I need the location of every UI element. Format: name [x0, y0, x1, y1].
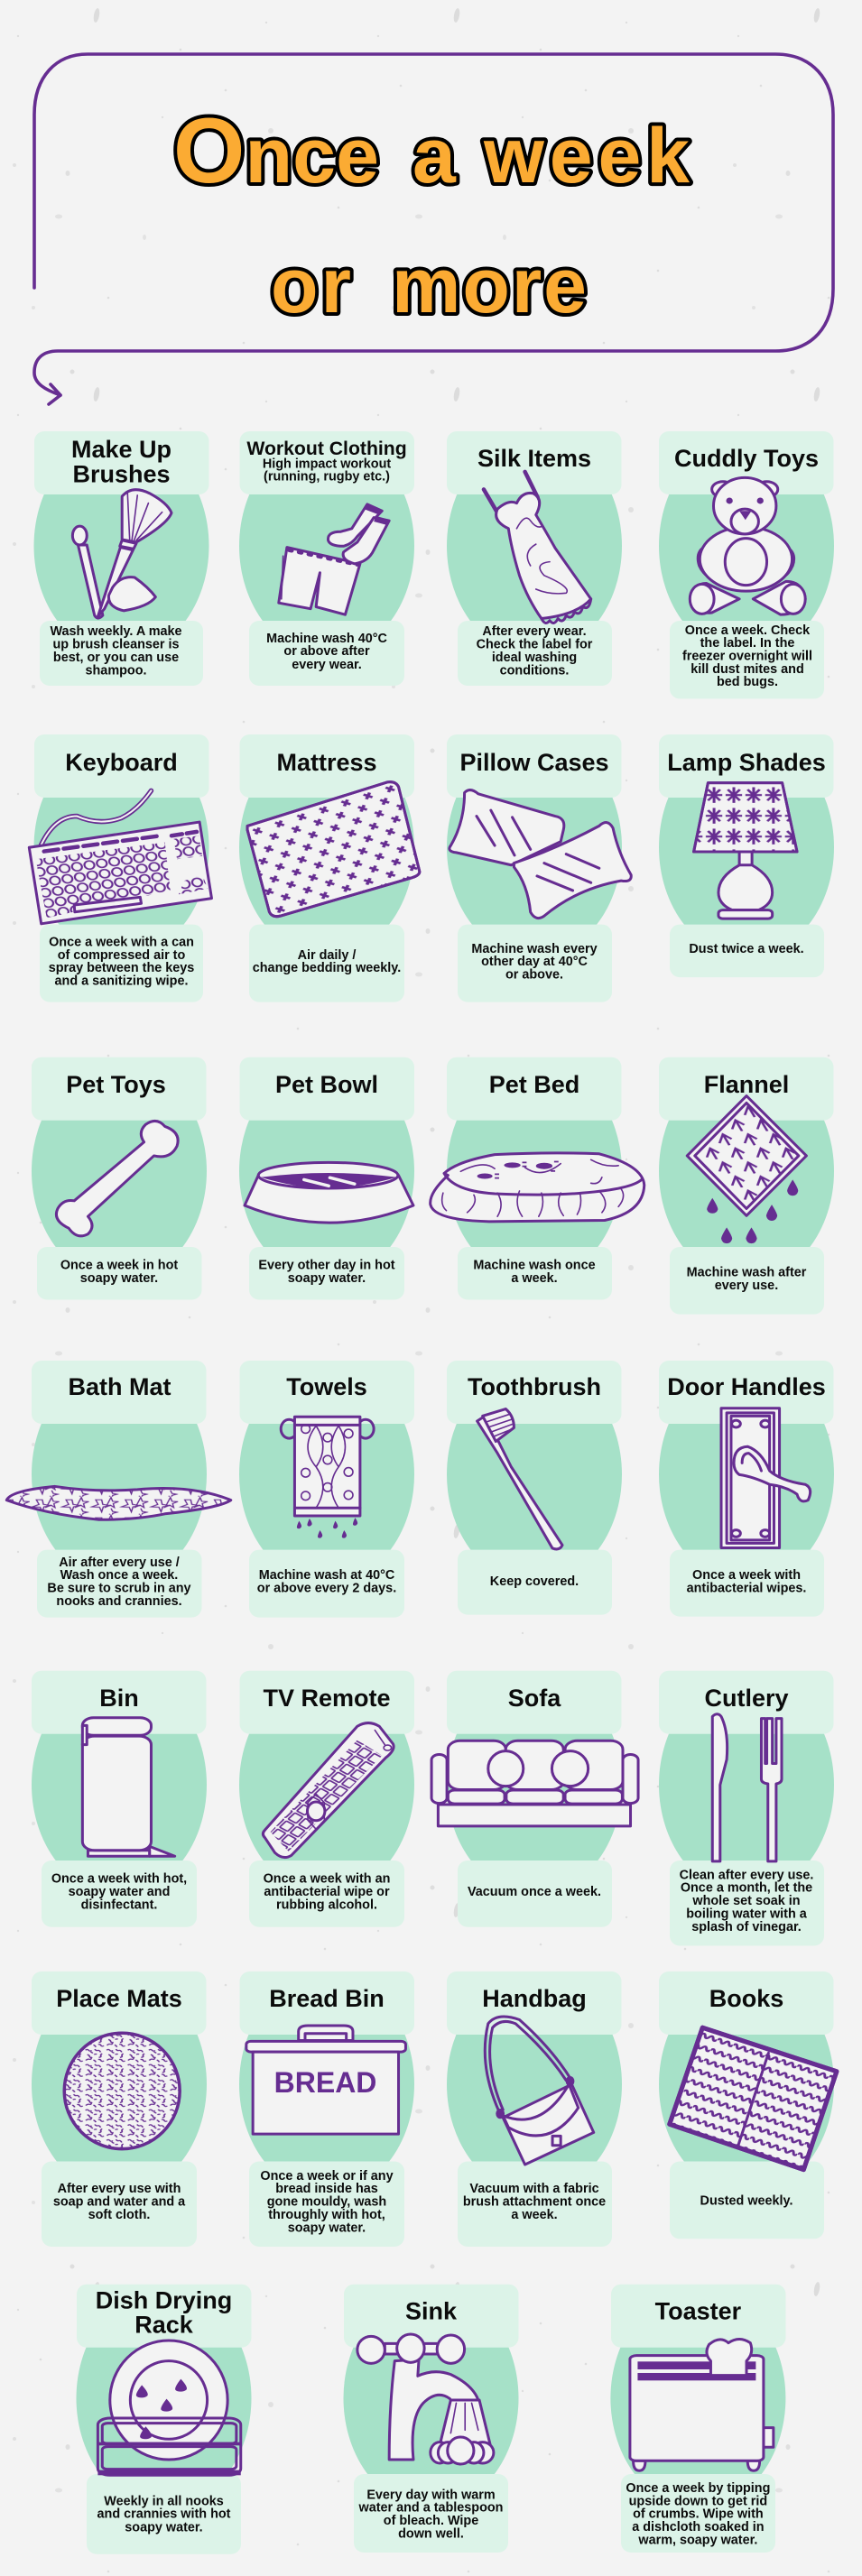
description: up brush cleanser is: [53, 637, 179, 651]
description: [670, 1247, 824, 1315]
oval: [659, 1974, 834, 2194]
oval: [659, 1675, 834, 1895]
description: rubbing alcohol.: [276, 1897, 377, 1912]
title: week: [483, 113, 690, 199]
description: warm, soapy water.: [637, 2533, 757, 2547]
oval: [32, 1974, 207, 2194]
description: Once a week with an: [264, 1872, 390, 1887]
panel: Toaster: [610, 2285, 785, 2553]
description: of bleach. Wipe: [384, 2514, 478, 2528]
panel: Pillow Cases: [447, 734, 631, 1002]
panel: Books: [659, 1971, 837, 2239]
icon: teddy bear: [690, 477, 805, 614]
oval: [239, 737, 414, 957]
icon: plate in dish rack: [97, 2341, 241, 2475]
description: and crannies with hot: [97, 2507, 231, 2522]
oval: [659, 436, 834, 656]
description: best, or you can use: [53, 651, 179, 665]
icon: remote control: [263, 1723, 394, 1858]
panel: Workout Clothing: [239, 431, 414, 686]
oval: [32, 1061, 207, 1281]
description: antibacterial wipe or: [264, 1885, 390, 1899]
description: [37, 1550, 202, 1618]
description: Once a month, let the: [681, 1881, 812, 1896]
description: Once a week with: [692, 1568, 801, 1583]
heading: [34, 431, 209, 494]
description: whole set soak in: [691, 1894, 801, 1908]
description: Clean after every use.: [680, 1868, 813, 1882]
description: [249, 1860, 404, 1927]
heading: Toothbrush: [468, 1373, 601, 1400]
description: Dust twice a week.: [689, 942, 804, 956]
title: a: [412, 113, 457, 199]
description: ideal washing: [492, 651, 577, 665]
oval: [76, 2288, 251, 2508]
description: [249, 925, 404, 1002]
description: soapy water and: [69, 1885, 170, 1899]
description: brush attachment once: [463, 2194, 606, 2209]
description: antibacterial wipes.: [687, 1581, 806, 1595]
heading: Make Up: [71, 436, 171, 463]
heading: Pet Bowl: [275, 1071, 378, 1098]
description: Machine wash after: [687, 1265, 807, 1279]
title: Once: [173, 99, 379, 202]
icon: make up brushes: [72, 490, 171, 618]
oval: [34, 436, 209, 656]
description: soapy water.: [288, 2221, 366, 2236]
oval: [447, 1364, 622, 1584]
description: [670, 925, 824, 977]
description: shampoo.: [86, 664, 146, 679]
panel: Cuddly Toys: [659, 431, 834, 698]
description: [458, 2162, 612, 2247]
heading: Towels: [286, 1373, 367, 1400]
heading: Bin: [99, 1685, 139, 1712]
icon: bread bin: [246, 2026, 405, 2134]
icon: pet bowl: [245, 1162, 413, 1223]
heading: Books: [709, 1985, 783, 2012]
description: upside down to get rid: [629, 2494, 767, 2508]
description: other day at 40°C: [481, 955, 588, 969]
heading: [240, 431, 414, 494]
description: [42, 1860, 197, 1927]
description: of compressed air to: [58, 948, 185, 963]
heading: [240, 1971, 414, 2035]
oval: [610, 2288, 785, 2508]
oval: [659, 1364, 834, 1584]
icon: pillows: [450, 790, 631, 919]
oval: [447, 1061, 622, 1281]
panel: Towels: [239, 1361, 414, 1618]
description: [458, 621, 612, 686]
heading: Workout Clothing: [246, 439, 407, 459]
description: bed bugs.: [717, 675, 778, 689]
icon: toaster: [630, 2339, 774, 2470]
heading: Sofa: [508, 1685, 561, 1712]
description: Check the label for: [477, 637, 593, 651]
heading: [240, 1057, 414, 1121]
heading: Brushes: [72, 461, 171, 488]
icon: bath mat: [6, 1486, 231, 1519]
panel: Flannel: [659, 1057, 834, 1315]
heading: Handbag: [482, 1985, 587, 2012]
description: soapy water.: [80, 1271, 158, 1286]
heading: [77, 2285, 251, 2348]
heading: High impact workout: [263, 457, 391, 471]
description: Once a week or if any: [260, 2169, 394, 2184]
description: freezer overnight will: [682, 650, 812, 664]
description: a week.: [511, 2208, 558, 2222]
panel: Pet Bowl: [239, 1057, 414, 1299]
panel: Place Mats: [32, 1971, 207, 2247]
heading: [659, 1671, 834, 1734]
description: [249, 2162, 404, 2247]
description: [670, 621, 824, 698]
description: of crumbs. Wipe with: [633, 2507, 764, 2522]
description: splash of vinegar.: [691, 1920, 802, 1934]
panel: Cutlery: [659, 1671, 834, 1945]
description: [37, 1247, 202, 1299]
icon: lamp: [694, 783, 797, 919]
oval: [239, 436, 414, 656]
heading: Sink: [405, 2298, 458, 2325]
heading: Bread Bin: [269, 1985, 385, 2012]
description: water and a tablespoon: [358, 2501, 503, 2516]
description: and a sanitizing wipe.: [55, 974, 188, 988]
description: Vacuum with a fabric: [469, 2182, 599, 2196]
description: soap and water and a: [53, 2194, 186, 2209]
heading: Dish Drying: [96, 2286, 232, 2313]
heading: [447, 431, 621, 494]
description: disinfectant.: [81, 1897, 157, 1912]
icon: knife and fork: [712, 1714, 782, 1861]
heading: Pillow Cases: [459, 749, 609, 776]
icon: door handle: [721, 1408, 811, 1548]
oval: [34, 737, 209, 957]
heading: Silk Items: [477, 445, 591, 472]
description: Air after every use /: [59, 1556, 180, 1570]
icon: keyboard: [29, 790, 211, 924]
description: change bedding weekly.: [253, 961, 401, 975]
heading: Place Mats: [56, 1985, 182, 2012]
description: [670, 2162, 824, 2239]
oval: [447, 1675, 622, 1895]
description: Vacuum once a week.: [468, 1885, 601, 1899]
panel: Lamp Shades: [659, 734, 834, 977]
description: throughly with hot,: [268, 2208, 385, 2222]
panel: Keyboard: [29, 734, 211, 1002]
panel: Sofa: [431, 1671, 638, 1927]
icon: open book: [670, 2027, 837, 2170]
panel: Door Handles: [659, 1361, 834, 1617]
heading: [240, 1671, 414, 1734]
description: [458, 1247, 612, 1299]
title: more: [392, 243, 587, 329]
oval: [447, 1974, 622, 2194]
oval: [447, 737, 622, 957]
heading: [447, 734, 621, 798]
description: [249, 1247, 404, 1299]
description: Be sure to scrub in any: [47, 1581, 191, 1595]
icon: toothbrush: [477, 1409, 562, 1549]
description: conditions.: [500, 664, 569, 679]
heading: Toaster: [655, 2298, 742, 2325]
description: the label. In the: [700, 636, 794, 651]
oval: [659, 1061, 834, 1281]
description: [354, 2474, 508, 2553]
heading: [611, 2285, 785, 2348]
icon: towel: [281, 1417, 374, 1538]
description: Every day with warm: [366, 2488, 496, 2502]
description: gone mouldy, wash: [267, 2194, 386, 2209]
panel: Dish Drying Rack: [76, 2285, 251, 2554]
panel: Make Up Brushes: [34, 431, 209, 686]
icon: pet bed: [431, 1153, 644, 1222]
heading: [32, 1971, 206, 2035]
description: Machine wash every: [471, 942, 598, 956]
description: Air daily /: [298, 948, 356, 963]
description: Every other day in hot: [258, 1259, 395, 1273]
description: [670, 1550, 824, 1617]
heading: [659, 1361, 834, 1424]
icon: sofa: [431, 1740, 638, 1826]
oval: [239, 1675, 414, 1895]
heading: [447, 1057, 621, 1121]
panel: Bin: [32, 1671, 207, 1927]
description: or above every 2 days.: [257, 1581, 396, 1595]
heading: [447, 1671, 621, 1734]
description: [458, 925, 612, 1002]
description: Machine wash 40°C: [266, 632, 387, 646]
icon: bone: [56, 1121, 178, 1236]
panel: Silk Items: [447, 431, 622, 686]
icon: tap: [357, 2334, 494, 2464]
description: [670, 1860, 824, 1945]
heading: Keyboard: [65, 749, 178, 776]
description: a dishcloth soaked in: [632, 2520, 765, 2534]
description: Dusted weekly.: [700, 2194, 792, 2209]
heading: [659, 734, 834, 798]
description: Wash weekly. A make: [50, 624, 182, 639]
description: a week.: [511, 1271, 558, 1286]
oval: [239, 1061, 414, 1281]
description: every wear.: [292, 658, 362, 672]
description: Machine wash at 40°C: [259, 1568, 394, 1583]
heading: [240, 734, 414, 798]
panel: Pet Bed: [431, 1057, 644, 1299]
description: [40, 925, 203, 1002]
description: Wash once a week.: [60, 1568, 178, 1583]
description: bread inside has: [275, 2182, 378, 2196]
icon: bread bin: BREAD: [274, 2066, 376, 2099]
icon: handbag: [485, 2017, 594, 2165]
description: down well.: [398, 2526, 464, 2541]
description: Once a week in hot: [60, 1259, 178, 1273]
description: soapy water.: [125, 2520, 203, 2534]
heading: [240, 1361, 414, 1424]
icon: bin: [82, 1718, 175, 1856]
heading: Pet Toys: [66, 1071, 166, 1098]
description: or above.: [505, 967, 563, 982]
icon: silk dress: [484, 472, 591, 623]
heading: [344, 2285, 518, 2348]
oval: [239, 1974, 414, 2194]
description: every use.: [715, 1279, 778, 1293]
description: Once a week with a can: [49, 935, 194, 949]
title frame arrow: [34, 54, 833, 404]
description: Once a week by tipping: [626, 2481, 770, 2496]
icon: flannel: [687, 1096, 806, 1243]
title: [173, 99, 690, 329]
description: [249, 1550, 404, 1618]
oval: [239, 1364, 414, 1584]
panel: Pet Toys: [32, 1057, 207, 1299]
heading: [659, 1057, 834, 1121]
panel: Sink: [343, 2285, 518, 2553]
heading: Flannel: [704, 1071, 789, 1098]
heading: Mattress: [276, 749, 377, 776]
heading: Pet Bed: [489, 1071, 579, 1098]
description: Machine wash once: [473, 1259, 596, 1273]
description: [42, 2162, 197, 2247]
description: Keep covered.: [490, 1574, 579, 1589]
panel: TV Remote: [239, 1671, 414, 1927]
heading: Bath Mat: [69, 1373, 171, 1400]
heading: [34, 734, 209, 798]
icon: shorts and socks: [279, 503, 390, 614]
description: nooks and crannies.: [56, 1594, 182, 1609]
panel: Bath Mat: [6, 1361, 231, 1618]
description: [458, 1550, 612, 1615]
title: or: [271, 243, 351, 329]
heading: [659, 1971, 834, 2035]
panel: Handbag: [447, 1971, 622, 2247]
heading: Lamp Shades: [667, 749, 826, 776]
oval: [659, 737, 834, 957]
description: After every use with: [58, 2182, 181, 2196]
description: [87, 2474, 241, 2554]
panel: Mattress: [239, 734, 420, 1002]
heading: Door Handles: [667, 1373, 826, 1400]
description: Once a week. Check: [685, 623, 811, 638]
heading: [32, 1361, 206, 1424]
description: After every wear.: [482, 624, 587, 639]
description: [249, 621, 404, 686]
heading: Rack: [134, 2312, 194, 2339]
description: kill dust mites and: [691, 662, 804, 677]
heading: Cuddly Toys: [674, 445, 819, 472]
description: Weekly in all nooks: [104, 2495, 224, 2509]
description: spray between the keys: [49, 961, 194, 975]
description: or above after: [283, 644, 370, 659]
description: [621, 2474, 775, 2553]
heading: [447, 1361, 621, 1424]
description: boiling water with a: [686, 1907, 808, 1922]
icon: mattress: [247, 782, 420, 917]
description: [458, 1860, 612, 1927]
description: Once a week with hot,: [51, 1872, 187, 1887]
heading: [447, 1971, 621, 2035]
description: [40, 621, 203, 686]
oval: [447, 436, 622, 656]
icon: place mat: [64, 2033, 180, 2149]
heading: [659, 431, 834, 494]
heading: [32, 1057, 206, 1121]
description: soft cloth.: [88, 2208, 150, 2222]
panel: Bread Bin: [239, 1971, 414, 2247]
oval: [32, 1675, 207, 1895]
heading: [32, 1671, 206, 1734]
heading: TV Remote: [263, 1685, 391, 1712]
heading: (running, rugby etc.): [264, 469, 390, 484]
oval: [343, 2288, 518, 2508]
heading: Cutlery: [704, 1685, 789, 1712]
description: soapy water.: [288, 1271, 366, 1286]
panel: Toothbrush: [447, 1361, 622, 1615]
oval: [32, 1364, 207, 1584]
